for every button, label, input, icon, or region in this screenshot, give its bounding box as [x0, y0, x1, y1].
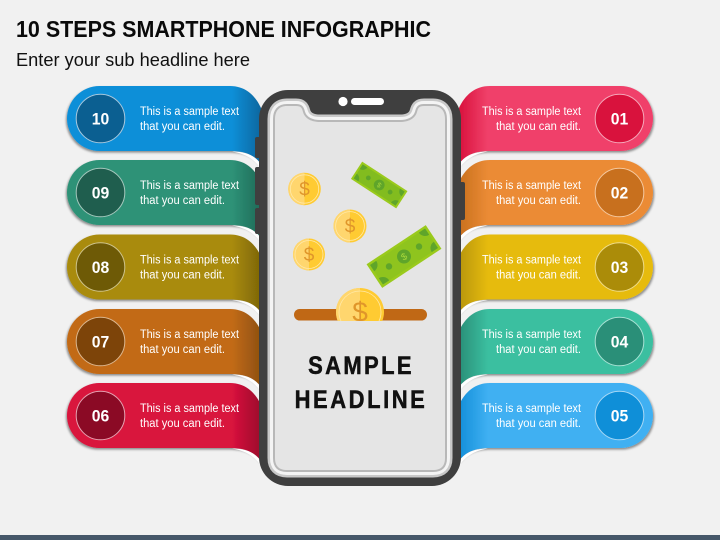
coin 1	[288, 173, 321, 205]
phone bezel and screen	[275, 106, 445, 470]
coin slot	[294, 309, 427, 320]
step 04 tab	[459, 309, 653, 392]
step 07 tab: 07	[92, 334, 109, 352]
step 03 tab: that you can edit.	[496, 270, 581, 282]
step 01 tab: This is a sample text	[482, 106, 582, 118]
step 06 tab: that you can edit.	[140, 418, 225, 430]
coin 3: $	[304, 245, 315, 266]
step 06 tab: This is a sample text	[140, 403, 240, 415]
phone body	[259, 90, 461, 486]
step 08 tab: This is a sample text	[140, 254, 240, 266]
banknote small	[351, 162, 408, 208]
step 09 tab: This is a sample text	[140, 180, 240, 192]
step 08 tab	[67, 234, 261, 318]
step 09 tab: 09	[92, 184, 109, 202]
step 03 tab: This is a sample text	[482, 254, 582, 266]
step 03 tab: 03	[611, 259, 628, 277]
coin 2: $	[345, 216, 356, 238]
smartphone	[255, 90, 465, 486]
step 09 tab: that you can edit.	[140, 195, 225, 207]
step 04 tab: This is a sample text	[482, 329, 582, 341]
step 01 tab: 01	[611, 110, 628, 128]
step 10 tab: that you can edit.	[140, 121, 225, 133]
step 05 tab: This is a sample text	[482, 403, 582, 415]
step 08 tab: that you can edit.	[140, 270, 225, 282]
coin 2	[334, 210, 366, 242]
phone side buttons	[255, 137, 465, 234]
step 10 tab: This is a sample text	[140, 106, 240, 118]
coin entering slot	[336, 288, 384, 321]
coin 3	[293, 238, 325, 270]
screen headline	[295, 352, 427, 413]
step 05 tab: that you can edit.	[496, 418, 581, 430]
step 01 tab	[459, 86, 653, 169]
step 07 tab	[67, 309, 261, 392]
step 06 tab	[67, 383, 261, 466]
step 10 tab: 10	[92, 110, 109, 128]
step 07 tab: This is a sample text	[140, 329, 240, 341]
step 02 tab	[459, 160, 653, 243]
step 02 tab: that you can edit.	[496, 195, 581, 207]
footer bar	[0, 535, 720, 540]
step 09 tab	[67, 160, 261, 243]
banknote large: $	[399, 251, 410, 263]
banknote small: $	[375, 182, 382, 190]
banknote large	[366, 225, 442, 288]
screen headline: SAMPLE	[308, 352, 414, 379]
step 04 tab: 04	[611, 334, 629, 352]
coin entering slot: $	[352, 296, 368, 328]
title: 10 STEPS SMARTPHONE INFOGRAPHIC	[16, 16, 431, 42]
step 02 tab: This is a sample text	[482, 180, 582, 192]
step 04 tab: that you can edit.	[496, 344, 581, 356]
step 06 tab: 06	[92, 408, 109, 426]
step 10 tab	[67, 86, 261, 169]
camera	[338, 97, 348, 106]
step 02 tab: 02	[611, 184, 628, 202]
step 05 tab: 05	[611, 408, 628, 426]
step 03 tab	[459, 234, 653, 318]
step 08 tab: 08	[92, 259, 109, 277]
screen headline: HEADLINE	[295, 386, 427, 413]
step 07 tab: that you can edit.	[140, 344, 225, 356]
speaker	[351, 98, 384, 105]
step 01 tab: that you can edit.	[496, 121, 581, 133]
coin 1: $	[299, 180, 310, 200]
step 05 tab	[459, 383, 653, 466]
subtitle: Enter your sub headline here	[16, 50, 250, 70]
